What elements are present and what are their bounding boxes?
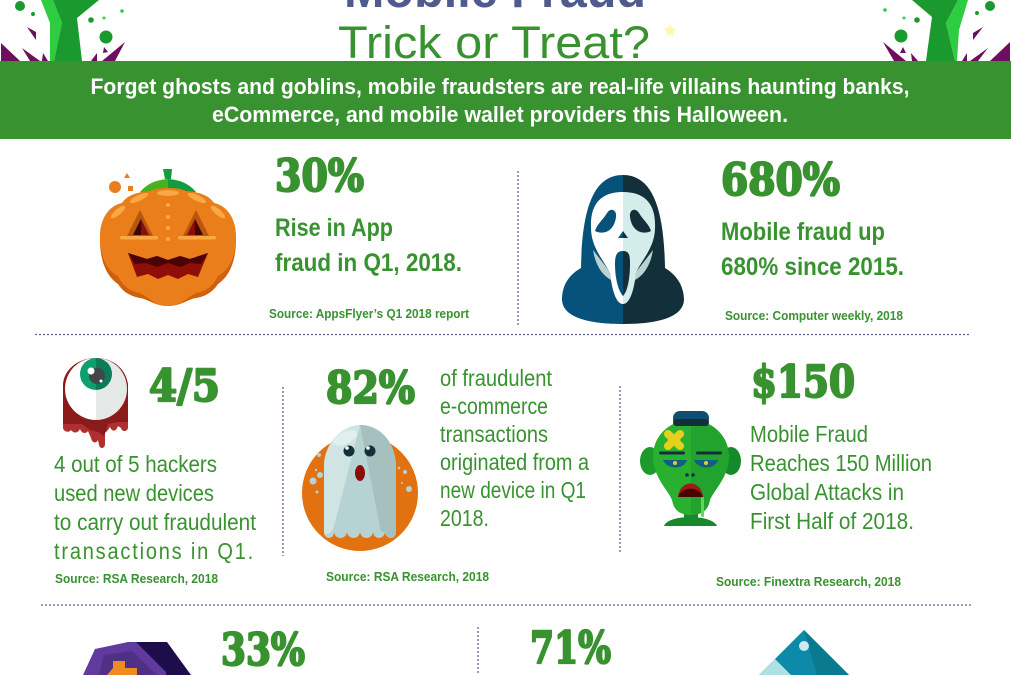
icon: coffin xyxy=(83,642,191,675)
stat: $150 xyxy=(716,357,932,589)
stat: $150: Source: Finextra Research, 2018 xyxy=(716,574,901,589)
stat: 4/5: to carry out fraudulent xyxy=(54,509,257,535)
stat: 30%: fraud in Q1, 2018. xyxy=(275,249,462,277)
icon: ghostface xyxy=(562,175,684,324)
stat: 680%: Source: Computer weekly, 2018 xyxy=(725,308,903,323)
icon: teal tombstone xyxy=(759,630,849,675)
stat: 82%: transactions xyxy=(440,421,548,447)
icon: right zombie hand xyxy=(883,0,1010,61)
icon: star xyxy=(664,24,676,36)
stat: 82%: new device in Q1 xyxy=(440,477,586,503)
banner xyxy=(0,61,1011,139)
stat: 680%: 680% since 2015. xyxy=(721,253,904,281)
stat: 4/5: 4 out of 5 hackers xyxy=(54,451,217,477)
icon: ghost xyxy=(302,425,418,551)
banner: Forget ghosts and goblins, mobile fraudsters are real-life villains haunting banks, xyxy=(90,74,910,99)
stat: 82%: originated from a xyxy=(440,449,589,475)
stat: 4/5: 4/5 xyxy=(149,361,220,412)
stat: 82% xyxy=(326,363,589,584)
stat: 4/5: Source: RSA Research, 2018 xyxy=(55,571,218,586)
stat: 82%: of fraudulent xyxy=(440,365,553,391)
stat: 30%: Source: AppsFlyer’s Q1 2018 report xyxy=(269,306,470,321)
divider xyxy=(282,387,284,556)
stat: $150: First Half of 2018. xyxy=(750,508,914,534)
title: Trick or Treat? xyxy=(338,17,650,68)
stat: 82%: Source: RSA Research, 2018 xyxy=(326,569,489,584)
icon: left zombie hand xyxy=(1,0,125,61)
stat: 33%: 33% xyxy=(221,625,305,675)
divider xyxy=(41,604,971,606)
stat: 30%: Rise in App xyxy=(275,214,393,242)
divider xyxy=(619,386,621,552)
stat: 4/5: used new devices xyxy=(54,480,214,506)
icon: pumpkin xyxy=(100,169,236,306)
stat: 82%: 2018. xyxy=(440,505,489,531)
divider xyxy=(477,627,479,675)
stat: 30%: 30% xyxy=(275,151,364,202)
stat: $150: Reaches 150 Million xyxy=(750,450,932,476)
stat: 680%: Mobile fraud up xyxy=(721,218,885,246)
stat: $150: Global Attacks in xyxy=(750,479,904,505)
icon: zombie xyxy=(640,411,741,526)
divider xyxy=(35,334,970,336)
icon: eyeball xyxy=(63,358,128,448)
stat: 680% xyxy=(721,155,904,323)
stat: 82%: 82% xyxy=(326,363,415,414)
divider xyxy=(517,171,519,325)
title xyxy=(338,0,650,68)
stat: $150: $150 xyxy=(751,357,855,408)
stat: 4/5 xyxy=(54,361,257,586)
stat: 71%: 71% xyxy=(530,623,611,674)
banner: eCommerce, and mobile wallet providers this Halloween. xyxy=(212,102,788,127)
stat: 82%: e-commerce xyxy=(440,393,548,419)
stat: $150: Mobile Fraud xyxy=(750,421,868,447)
stat: 680%: 680% xyxy=(721,155,840,206)
stat: 4/5: transactions in Q1. xyxy=(54,538,253,564)
stat: 30% xyxy=(269,151,470,321)
